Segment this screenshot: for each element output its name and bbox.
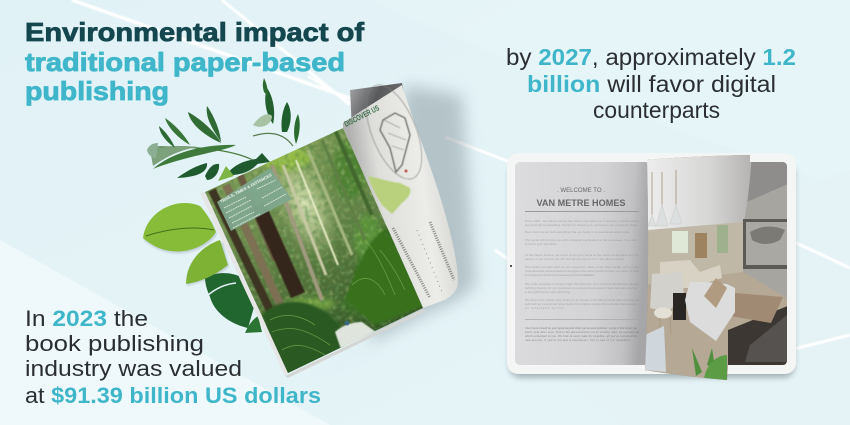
camera dot xyxy=(510,265,512,267)
page edge xyxy=(200,192,288,376)
black side table xyxy=(673,293,686,320)
title: Environmental impact of xyxy=(25,17,364,47)
text: 2023 valuation: book publishing xyxy=(25,331,204,356)
brochure body text: with both an exceptional home build of the highest quality from a builder that pledges xyxy=(525,302,638,306)
text: 2027 forecast xyxy=(506,44,796,123)
light glow xyxy=(278,166,336,256)
green info box: TRAILS, TIMES & DISTANCES xyxy=(219,172,273,204)
brochure closing text: new service. If you're not just a homebuyer. You're one of our neighbors. xyxy=(525,338,631,342)
car xyxy=(345,321,349,325)
dining table xyxy=(730,293,783,323)
brochure body text: This guide will provide you with a detailed explanation of the processes, from start xyxy=(525,238,637,242)
interior photo on flap xyxy=(640,150,790,385)
artwork xyxy=(743,219,787,269)
map outline xyxy=(355,77,433,187)
tablet body xyxy=(507,153,796,374)
plant leaves xyxy=(143,78,300,333)
tablet xyxy=(507,150,796,385)
text: 2023 valuation xyxy=(25,306,321,408)
inner rolled page xyxy=(350,83,408,130)
brochure body text: is coming next in the home and ensure your utmost satisfaction. xyxy=(525,273,595,277)
icon: monstera leaf xyxy=(205,273,256,328)
forest road xyxy=(335,322,376,352)
armchair xyxy=(685,282,735,341)
magazine shadow xyxy=(300,85,476,380)
brochure rule xyxy=(525,211,639,212)
brochure closing text: build, year after year. This is the personalized, not so exactly, also, an exceptional xyxy=(525,330,639,334)
brochure body text: Since 1982, Van Metre Homes has built a reputation for innovation, craftsmanship xyxy=(525,219,640,223)
rolled page heading: DISCOVER US xyxy=(343,103,381,129)
fern mounds xyxy=(262,230,425,380)
map pin xyxy=(404,169,408,173)
tablet shadow xyxy=(509,162,795,378)
brochure body text: to end in your new home. xyxy=(525,242,557,246)
foliage texture xyxy=(205,128,421,342)
text: 2023 valuation: at $91.39 billion US dollars xyxy=(25,383,321,408)
brochure body text: We pride ourselves in doing it right the first time, as a result of outstanding people, xyxy=(525,282,639,286)
fern texture xyxy=(270,240,405,355)
pendant lights xyxy=(648,170,682,226)
foreground chair xyxy=(645,326,666,372)
brochure body text: and personal homebuilding. Thanks for choosing us, welcome to our community today xyxy=(525,223,638,227)
far sofa xyxy=(660,260,722,288)
brochure body text: fulfilling dreams for our customers to receive the greatest in learning and creating xyxy=(525,286,638,290)
green map region xyxy=(368,176,410,214)
text: 2023 valuation: industry was valued xyxy=(25,356,242,381)
brochure heading: VAN METRE HOMES xyxy=(536,198,626,209)
text: 2027 forecast: billion will favor digital xyxy=(527,71,776,97)
icon: small dark leaf xyxy=(245,316,262,333)
brochure closing text xyxy=(525,326,639,342)
title xyxy=(25,17,364,106)
page listings xyxy=(393,222,454,298)
brochure body text: a straightforward and rewarding. xyxy=(525,290,571,294)
brochure closing text: which embodied to you. We look at every walk for possible, all you've expected for xyxy=(525,334,637,338)
ceiling xyxy=(645,150,752,232)
title: traditional paper-based xyxy=(25,47,345,77)
text: 2027 forecast: counterparts xyxy=(593,97,720,123)
icon: upper sprig xyxy=(253,78,300,146)
plant on flap xyxy=(692,348,727,380)
foliage canopy xyxy=(258,140,420,370)
brochure body text: Over that time we built everything that our family is so passionate about today xyxy=(525,230,631,234)
right ceiling xyxy=(748,162,787,202)
icon: small leaf cluster xyxy=(177,153,270,180)
text: 2027 forecast: by 2027, approximately 1.2 xyxy=(506,44,796,70)
cushion xyxy=(704,278,727,308)
brochure body text: We work hard, tightly, your choice is to choose a Van Metre Home that rewards you xyxy=(525,298,640,302)
text: 2023 valuation: In 2023 the xyxy=(25,306,148,331)
brochure heading: . WELCOME TO . xyxy=(557,188,605,194)
tree trunks xyxy=(212,130,372,335)
round table xyxy=(654,308,672,318)
back wall xyxy=(648,222,743,285)
icon: second leaf xyxy=(186,240,228,284)
dark floor xyxy=(728,305,790,365)
near sofa xyxy=(650,272,684,312)
brochure rule xyxy=(525,318,639,321)
icon: fern branch left xyxy=(147,106,253,169)
brochure body text: its remarkable service. xyxy=(525,306,565,310)
icon: broad leaf xyxy=(143,203,216,251)
brochure body text: comprehensive communications throughout the entire process to keep you aware of what xyxy=(525,269,639,273)
brochure body text: We'll assist you with each of your selections, down to the finest detail, and provide xyxy=(525,265,640,269)
title: publishing xyxy=(25,76,169,106)
leaf shadows xyxy=(144,205,229,286)
brochure body text xyxy=(525,219,640,310)
magazine xyxy=(200,77,476,380)
forest photo xyxy=(200,125,428,380)
floor xyxy=(645,272,790,380)
rolled page xyxy=(343,77,458,308)
brochure body text: At Van Metre Homes, we strive to put your home at the center of attention and the xyxy=(525,253,640,257)
brochure heading xyxy=(536,188,626,209)
brochure closing text: Your home should be your great beyond what you've accomplished. Living in this home you xyxy=(525,326,638,330)
green info box xyxy=(217,168,292,231)
windows xyxy=(672,231,688,253)
brochure body text: quality of our homes you will find all you expect from Van Metre Homes. xyxy=(525,257,625,261)
right wall xyxy=(743,184,787,298)
left page xyxy=(515,162,650,365)
